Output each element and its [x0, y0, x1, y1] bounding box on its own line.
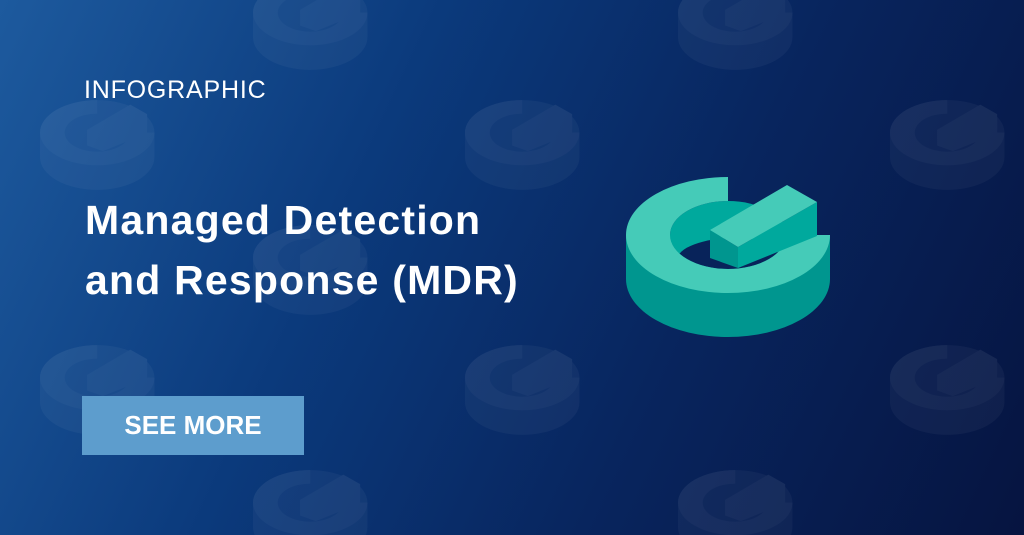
- icon: main logo: [626, 177, 830, 337]
- button: see more: SEE MORE: [124, 410, 262, 440]
- title: and Response (MDR): [85, 257, 519, 303]
- label: INFOGRAPHIC: INFOGRAPHIC: [84, 76, 266, 104]
- button: see more: [82, 396, 304, 455]
- title: Managed Detection: [85, 197, 481, 243]
- title: [85, 177, 820, 337]
